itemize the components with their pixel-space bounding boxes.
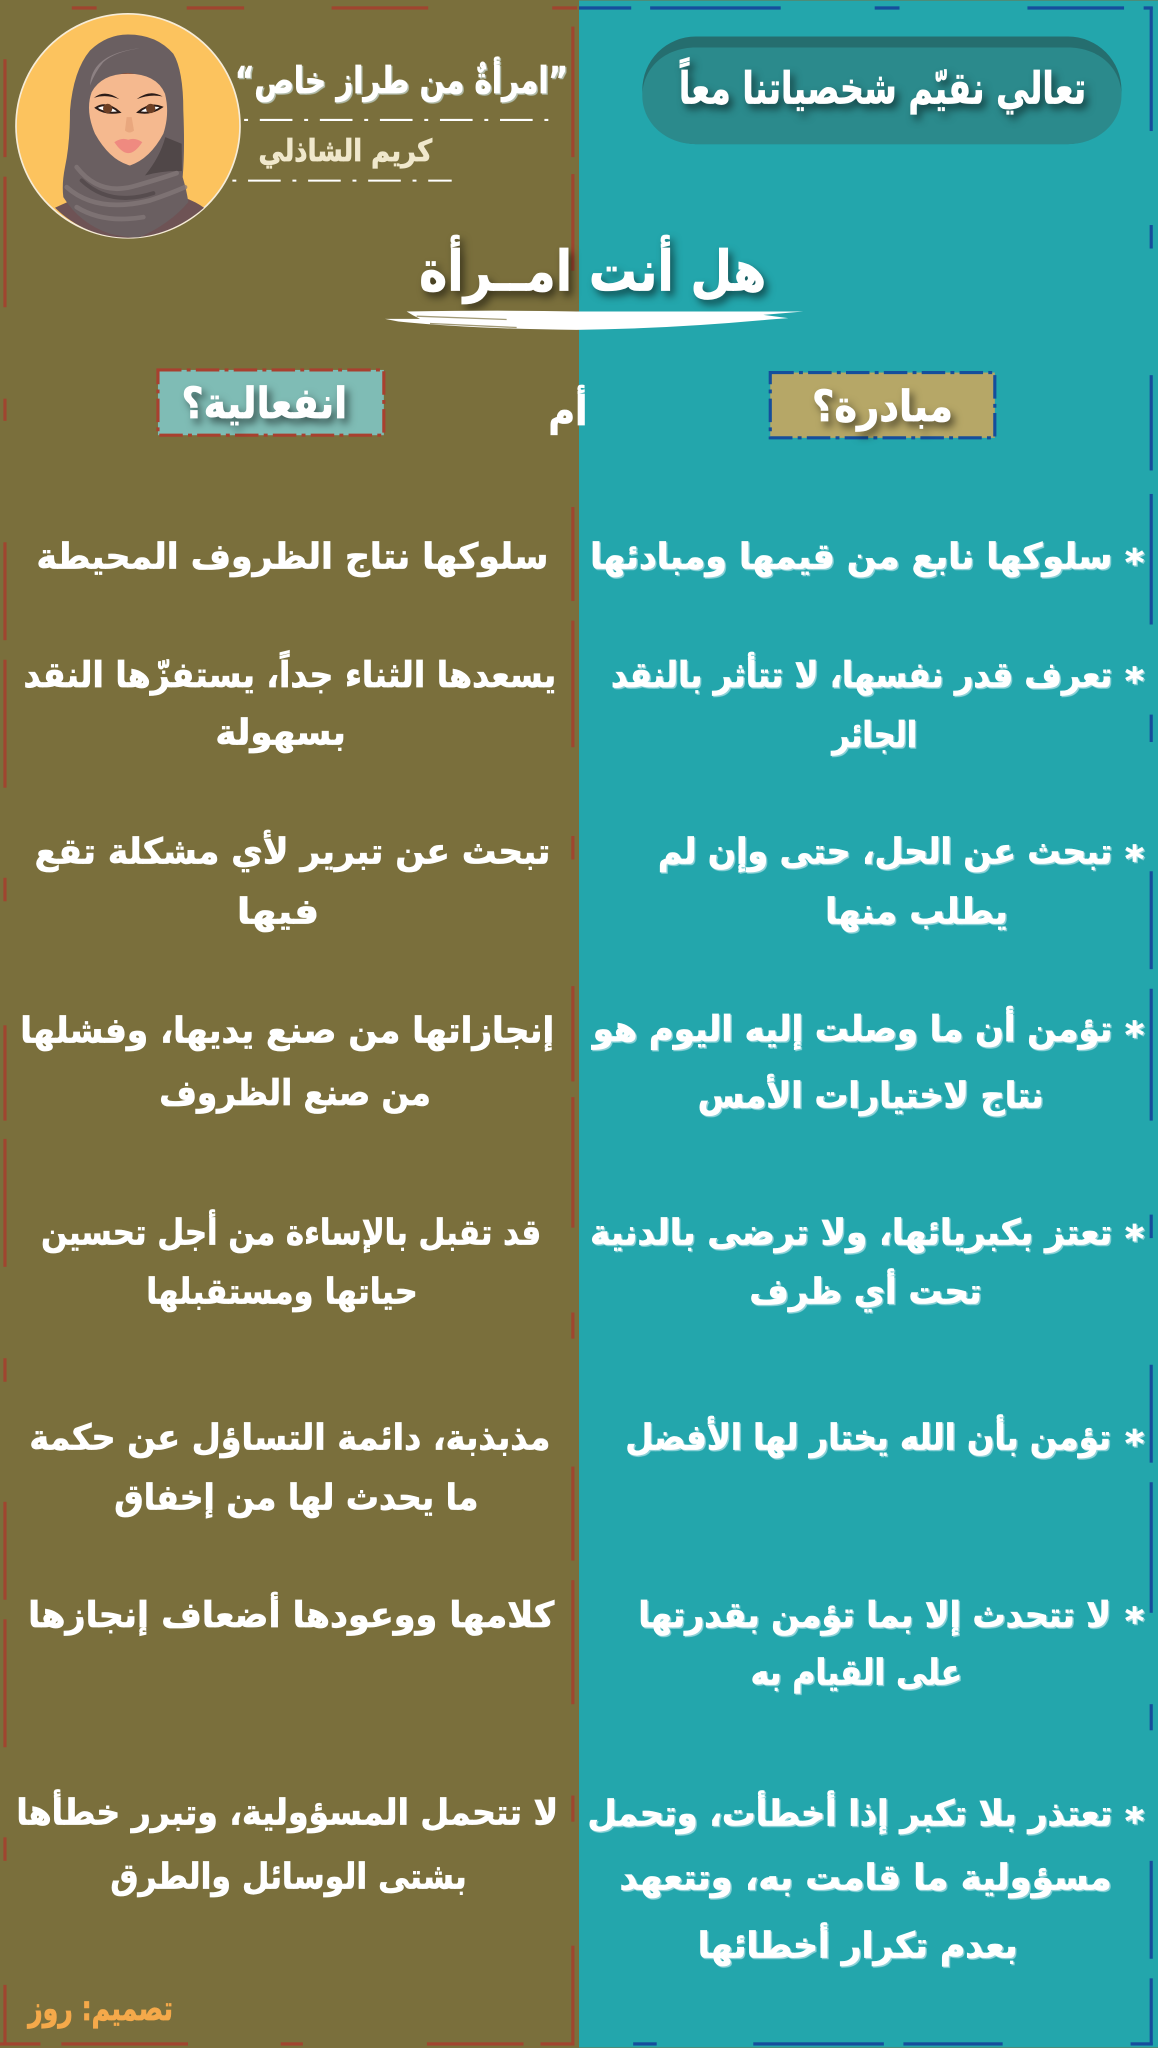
text: designer credit: تصميم: روز — [27, 1989, 173, 2029]
item 2: يسعدها الثناء جداً، يستفزّها النقد — [23, 649, 556, 696]
item 2: تعرف قدر نفسها، لا تتأثر بالنقد — [611, 652, 1112, 696]
item 8: تعتذر بلا تكبر إذا أخطأت، وتحمل — [587, 1791, 1112, 1835]
item 3: يطلب منها — [825, 891, 1008, 932]
item 2 — [611, 652, 1144, 756]
item 6: تؤمن بأن الله يختار لها الأفضل — [625, 1415, 1111, 1459]
item 5 — [590, 1213, 1144, 1312]
icon: woman in hijab avatar — [16, 14, 240, 238]
item 8: * — [1125, 1799, 1144, 1842]
item 7: * — [1125, 1600, 1144, 1643]
column: reactive traits — [16, 536, 558, 1897]
item 5: حياتها ومستقبلها — [146, 1271, 418, 1312]
item 8 — [16, 1789, 558, 1897]
item 2 — [23, 649, 556, 754]
item 3 — [35, 829, 550, 932]
item 4: من صنع الظروف — [159, 1073, 431, 1114]
item 6: ما يحدث لها من إخفاق — [114, 1478, 478, 1519]
item 4: تؤمن أن ما وصلت إليه اليوم هو — [591, 1006, 1112, 1050]
item 3: تبحث عن تبرير لأي مشكلة تقع — [35, 829, 550, 872]
item 3: تبحث عن الحل، حتى وإن لم — [658, 831, 1112, 872]
item 7: لا تتحدث إلا بما تؤمن بقدرتها — [638, 1595, 1111, 1636]
item 3: فيها — [237, 891, 319, 932]
box: proactive label: مبادرة؟ — [812, 382, 953, 432]
heading: quote title: ”امرأةٌ من طراز خاص“ — [235, 56, 568, 102]
item 5: قد تقبل بالإساءة من أجل تحسين — [41, 1210, 541, 1254]
item 8 — [587, 1791, 1144, 1966]
item 5 — [41, 1210, 541, 1312]
item 4: نتاج لاختيارات الأمس — [698, 1074, 1044, 1117]
item 7: كلامها ووعودها أضعاف إنجازها — [28, 1592, 555, 1636]
item 1: سلوكها نتاج الظروف المحيطة — [37, 536, 548, 577]
item 1: * — [1125, 541, 1144, 584]
item 3 — [658, 831, 1144, 932]
box: reactive label: انفعالية؟ — [181, 379, 347, 429]
item 7: على القيام به — [751, 1653, 962, 1694]
item 4: * — [1125, 1013, 1144, 1056]
panel: left olive background — [0, 0, 579, 2048]
decoration: white brush stroke — [385, 311, 803, 330]
panel: header pill — [642, 37, 1121, 144]
item 4 — [20, 1010, 554, 1114]
item 8: مسؤولية ما قامت به، وتتعهد — [619, 1858, 1112, 1899]
item 5: تعتز بكبريائها، ولا ترضى بالدنية — [590, 1213, 1112, 1254]
text: author name: كريم الشاذلي — [258, 134, 433, 169]
item 4 — [591, 1006, 1144, 1117]
item 7 — [638, 1595, 1144, 1694]
panel: right teal background — [579, 0, 1158, 2048]
item 6 — [29, 1418, 550, 1519]
item 8: بشتى الوسائل والطرق — [110, 1856, 467, 1897]
item 5: * — [1125, 1217, 1144, 1260]
box: proactive label — [770, 373, 995, 438]
item 2: بسهولة — [215, 713, 346, 754]
item 8: بعدم تكرار أخطائها — [698, 1922, 1018, 1966]
heading: main title: هل أنت امــرأة — [419, 234, 766, 304]
item 6: مذبذبة، دائمة التساؤل عن حكمة — [29, 1418, 550, 1459]
item 2: * — [1125, 660, 1144, 703]
item 1: سلوكها نابع من قيمها ومبادئها — [590, 536, 1112, 577]
item 5: تحت أي ظرف — [749, 1268, 982, 1312]
divider: dashed line bottom — [232, 180, 452, 182]
item 4: إنجازاتها من صنع يديها، وفشلها — [20, 1010, 554, 1051]
item 3: * — [1125, 837, 1144, 880]
item 8: لا تتحمل المسؤولية، وتبرر خطأها — [16, 1789, 558, 1833]
divider: dashed line top — [244, 119, 559, 121]
box: reactive label — [158, 370, 384, 435]
text: or: أم — [548, 385, 587, 436]
column: proactive traits — [587, 536, 1144, 1966]
item 2: الجائر — [831, 715, 917, 756]
item 6: * — [1125, 1422, 1144, 1465]
